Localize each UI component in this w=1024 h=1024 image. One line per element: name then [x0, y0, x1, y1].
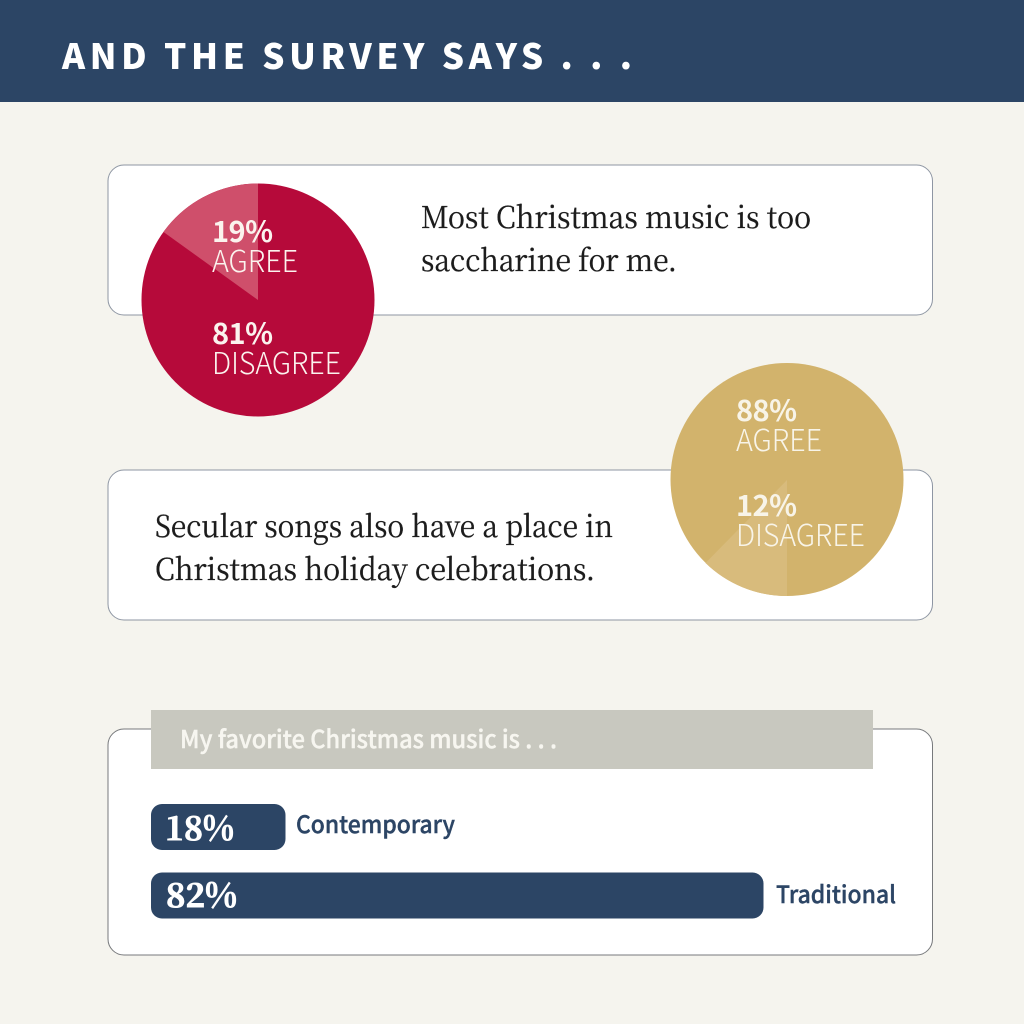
panel: secular songs statement	[108, 470, 932, 620]
pie chart: 88% agree, 12% disagree: DISAGREE	[736, 511, 865, 555]
pie chart: 19% agree, 81% disagree: 81%	[212, 311, 273, 353]
pie chart: 19% agree, 81% disagree	[142, 184, 374, 416]
statement text: saccharine for me.	[421, 236, 677, 280]
bar: traditional 82%	[151, 870, 896, 918]
header banner	[0, 0, 1024, 102]
bar: traditional 82%: Traditional	[776, 875, 896, 910]
pie chart: 88% agree, 12% disagree: 12%	[736, 483, 797, 525]
pie chart: 88% agree, 12% disagree: AGREE	[736, 416, 822, 460]
panel: favorite Christmas music	[108, 710, 932, 955]
bar: contemporary 18%: 18%	[165, 803, 234, 850]
statement text: Christmas holiday celebrations.	[155, 545, 595, 589]
pie chart: 19% agree, 81% disagree: AGREE	[212, 237, 298, 281]
panel: saccharine statement	[108, 165, 932, 315]
bar: contemporary 18%	[151, 803, 455, 850]
panel heading	[151, 710, 873, 769]
statement text	[155, 502, 613, 589]
pie chart: 88% agree, 12% disagree	[670, 363, 904, 596]
panel heading: My favorite Christmas music is . . .	[180, 721, 557, 756]
statement text	[421, 193, 811, 280]
pie chart: 19% agree, 81% disagree: 19%	[212, 209, 273, 251]
bar: contemporary 18%: Contemporary	[296, 805, 455, 840]
statement text: Most Christmas music is too	[421, 193, 811, 237]
pie chart: 88% agree, 12% disagree: 88%	[736, 388, 797, 430]
pie chart: 19% agree, 81% disagree: DISAGREE	[212, 339, 341, 383]
bar: traditional 82%: 82%	[166, 870, 237, 917]
statement text: Secular songs also have a place in	[155, 502, 613, 546]
title: AND THE SURVEY SAYS . . .	[61, 29, 632, 80]
